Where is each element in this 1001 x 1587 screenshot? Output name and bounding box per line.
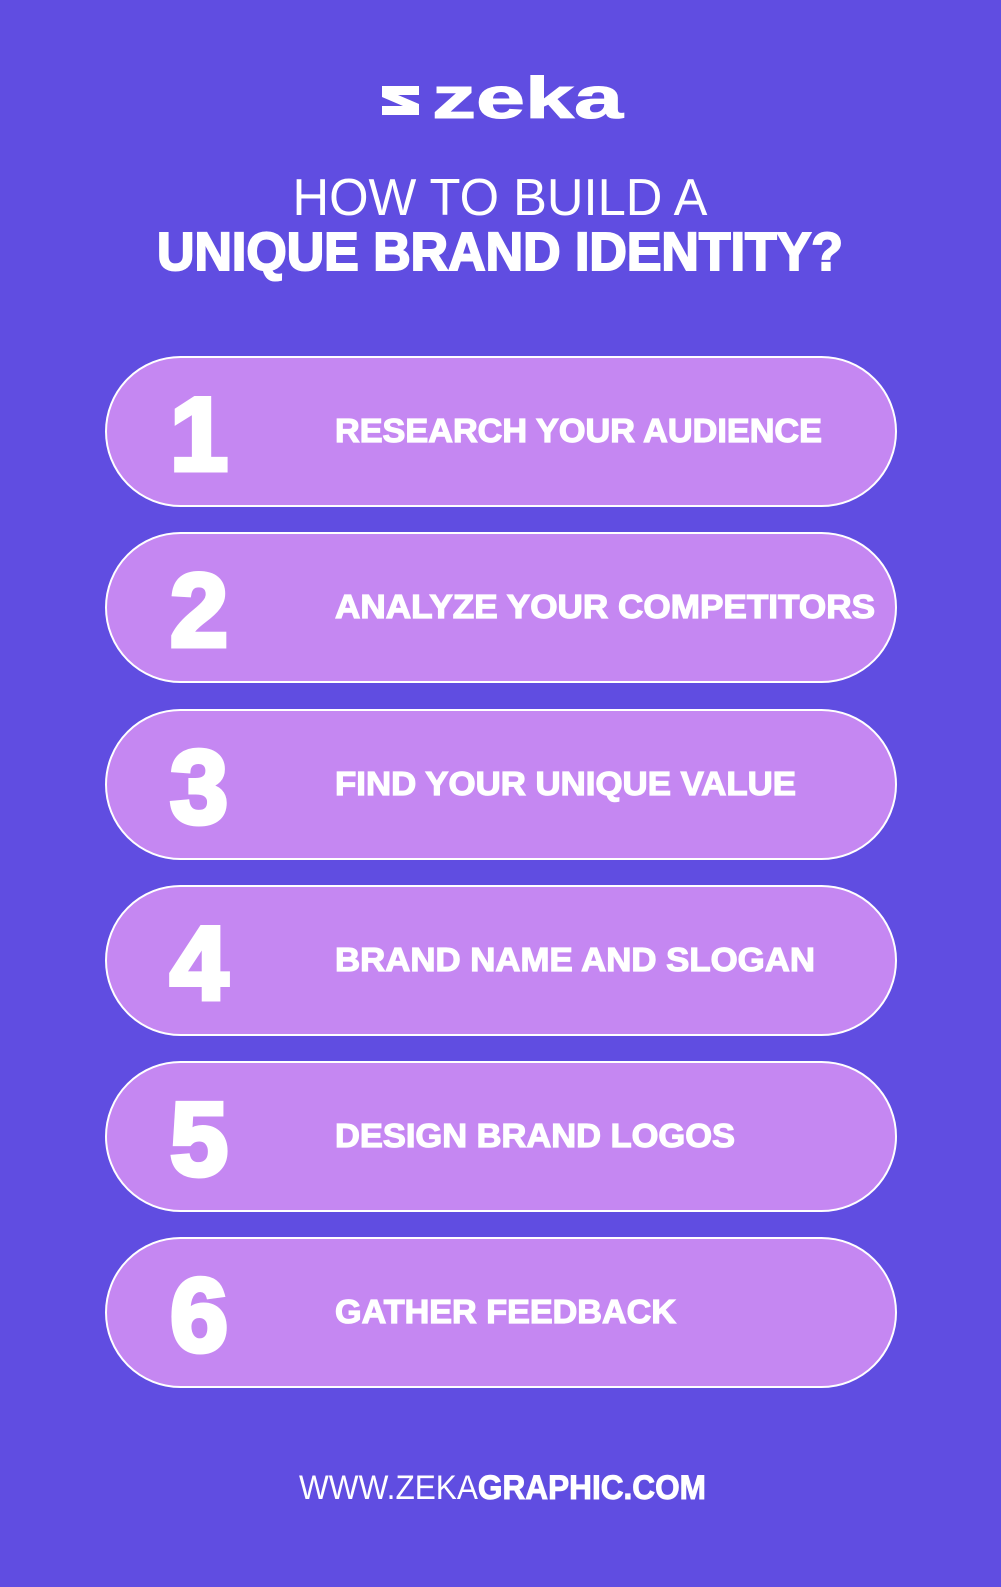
- step 2: 2: [170, 553, 228, 669]
- step 6: GATHER FEEDBACK: [335, 1293, 676, 1330]
- step 1: [106, 357, 896, 506]
- step 3: 3: [170, 730, 228, 846]
- step 1: 1: [170, 377, 228, 493]
- title: [157, 169, 843, 282]
- step 4: BRAND NAME AND SLOGAN: [335, 941, 815, 978]
- title: HOW TO BUILD A: [292, 169, 708, 227]
- step 4: 4: [170, 906, 228, 1022]
- step 1: RESEARCH YOUR AUDIENCE: [335, 412, 822, 449]
- title: UNIQUE BRAND IDENTITY?: [157, 222, 843, 282]
- step 5: [106, 1062, 896, 1211]
- logo: [382, 66, 624, 131]
- step 5: 5: [170, 1082, 228, 1198]
- step 6: [106, 1238, 896, 1387]
- step 5: DESIGN BRAND LOGOS: [335, 1117, 735, 1154]
- step 3: FIND YOUR UNIQUE VALUE: [335, 765, 796, 802]
- logo wordmark: zeka: [432, 66, 624, 131]
- footer url: WWW.ZEKAGRAPHIC.COM: [299, 1469, 706, 1507]
- step 2: ANALYZE YOUR COMPETITORS: [335, 588, 875, 625]
- icon: logo mark: [382, 86, 419, 115]
- step 6: 6: [170, 1258, 228, 1374]
- step 4: [106, 886, 896, 1035]
- step 2: [106, 533, 896, 682]
- step 3: [106, 710, 896, 859]
